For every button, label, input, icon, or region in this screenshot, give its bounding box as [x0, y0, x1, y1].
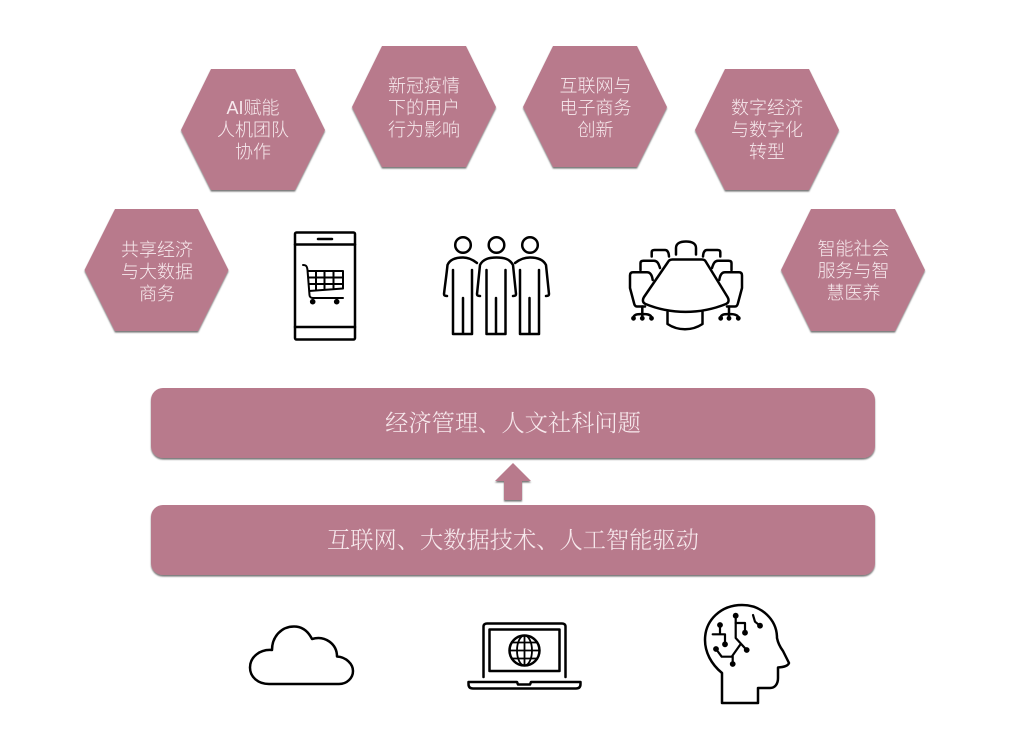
icon: cloud	[250, 626, 353, 684]
lower bar: 互联网、大数据技术、人工智能驱动: 互联网、大数据技术、人工智能驱动	[327, 528, 699, 554]
hexagon: 新冠疫情下的用户行为影响: 行为影响	[388, 120, 460, 140]
hexagon: 数字经济与数字化转型	[695, 69, 839, 190]
hexagon: 互联网与电子商务创新	[523, 46, 667, 167]
hexagon: 数字经济与数字化转型: 数字经济	[731, 98, 803, 118]
hexagon: 共享经济与大数据商务	[84, 209, 228, 331]
hexagon: AI赋能人机团队协作: AI赋能	[226, 98, 280, 118]
person: centre	[477, 237, 516, 334]
hexagon: 共享经济与大数据商务: 商务	[139, 284, 175, 304]
upper bar: 经济管理、人文社科问题	[151, 388, 875, 458]
icon: three people	[444, 237, 549, 334]
person: right	[515, 237, 549, 334]
hexagon: 共享经济与大数据商务: 共享经济	[121, 240, 193, 260]
hexagon: 互联网与电子商务创新: 创新	[578, 120, 614, 140]
hexagon: 智能社会服务与智慧医养: 智能社会	[818, 239, 890, 259]
lower bar: 互联网、大数据技术、人工智能驱动	[151, 505, 875, 575]
icon: head with circuit brain	[705, 605, 789, 703]
upper bar: 经济管理、人文社科问题: 经济管理、人文社科问题	[385, 411, 641, 437]
icon: laptop with globe	[468, 624, 580, 688]
hexagon: 数字经济与数字化转型: 转型	[749, 142, 785, 162]
hexagon: 智能社会服务与智慧医养: 慧医养	[826, 283, 880, 303]
hexagon: 智能社会服务与智慧医养	[781, 209, 925, 331]
icon: conference table	[630, 242, 742, 329]
arrow: upward	[495, 463, 531, 500]
hexagon: 新冠疫情下的用户行为影响: 下的用户	[388, 98, 460, 118]
hexagon: AI赋能人机团队协作	[181, 69, 325, 190]
hexagon: 共享经济与大数据商务: 与大数据	[121, 262, 193, 282]
hexagon: AI赋能人机团队协作: 协作	[235, 142, 271, 162]
hexagon: 智能社会服务与智慧医养: 服务与智	[818, 261, 890, 281]
hexagon: 新冠疫情下的用户行为影响	[352, 46, 496, 167]
hexagon: 互联网与电子商务创新: 互联网与	[560, 76, 632, 96]
hexagon: AI赋能人机团队协作: 人机团队	[217, 120, 289, 140]
hexagon: 新冠疫情下的用户行为影响: 新冠疫情	[388, 76, 460, 96]
hexagon: 互联网与电子商务创新: 电子商务	[560, 98, 632, 118]
person: left	[444, 237, 477, 334]
icon: phone with shopping cart	[295, 232, 355, 340]
hexagon: 数字经济与数字化转型: 与数字化	[731, 120, 803, 140]
